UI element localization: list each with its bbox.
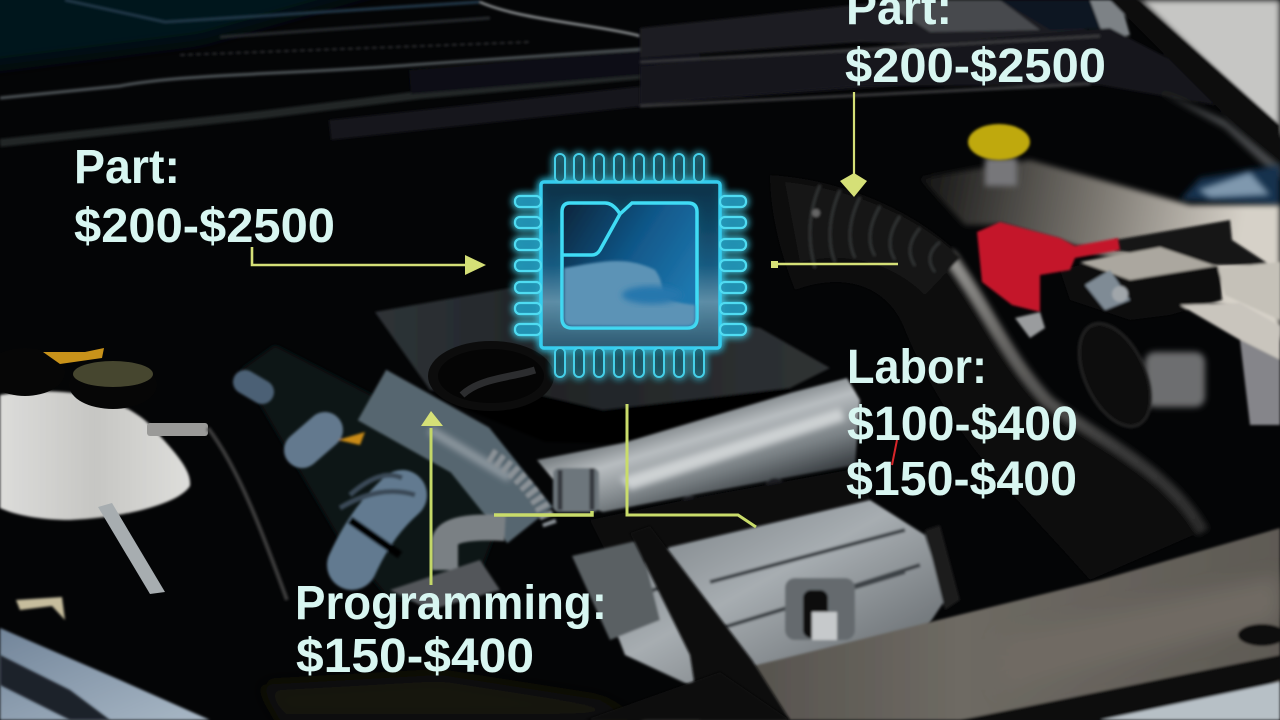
label: part cost left: $200-$2500 [74, 200, 335, 253]
label: programming cost: Programming: [295, 577, 607, 630]
arrow: top part label down to hose [840, 92, 867, 197]
chrome valve cover [572, 500, 960, 690]
coolant tank [0, 348, 208, 594]
silver hood edge lower left [0, 628, 210, 720]
label: programming cost [295, 577, 607, 683]
black engine cover [375, 288, 830, 445]
right pins [720, 196, 746, 335]
blue reflection in panel [622, 286, 682, 304]
label: part cost left [74, 141, 335, 253]
bottom pins [555, 348, 704, 377]
connector: short segment on intake [494, 511, 592, 515]
red mark [892, 440, 897, 465]
left pins [515, 196, 541, 335]
cream bracket [16, 597, 65, 620]
rubber intake hose [770, 175, 1205, 580]
label: part cost top right: $200-$2500 [845, 40, 1106, 93]
chip icon [515, 154, 746, 377]
folded corner line [562, 214, 620, 255]
navy tint upper left [0, 0, 480, 70]
windscreen cowl lines [0, 0, 1120, 143]
yellow filler cap [968, 124, 1030, 186]
oil filler cap [428, 341, 554, 411]
chip inner panel [562, 203, 697, 328]
dark lower frame [260, 675, 640, 720]
label: labor cost: $150-$400 [846, 453, 1077, 506]
front slam panel [640, 528, 1280, 720]
connector: chip to hose [771, 261, 898, 268]
intake runners [245, 382, 505, 610]
label: labor cost [846, 341, 1078, 506]
label: labor cost: Labor: [847, 341, 987, 394]
runner backdrop [240, 345, 500, 600]
label: part cost left: Part: [74, 141, 180, 194]
battery box [1060, 220, 1280, 425]
lower light area of panel [564, 261, 695, 326]
silver intake tube [372, 378, 870, 560]
arrow: left part label to chip [252, 247, 486, 275]
arrow: programming label up [421, 411, 443, 585]
top right bodywork [640, 0, 1280, 205]
label: part cost top right [845, 0, 1106, 93]
chip body [541, 182, 720, 348]
top pins [555, 154, 704, 182]
dark strut across cover [630, 526, 790, 720]
terminal bolt [1015, 312, 1045, 338]
red battery terminal [977, 222, 1120, 312]
right side tray [920, 160, 1280, 340]
label: labor cost: $100-$400 [847, 398, 1078, 451]
label: programming cost: $150-$400 [296, 630, 534, 683]
thin black wire [208, 428, 287, 600]
connector: chip down to valve cover [627, 404, 756, 527]
